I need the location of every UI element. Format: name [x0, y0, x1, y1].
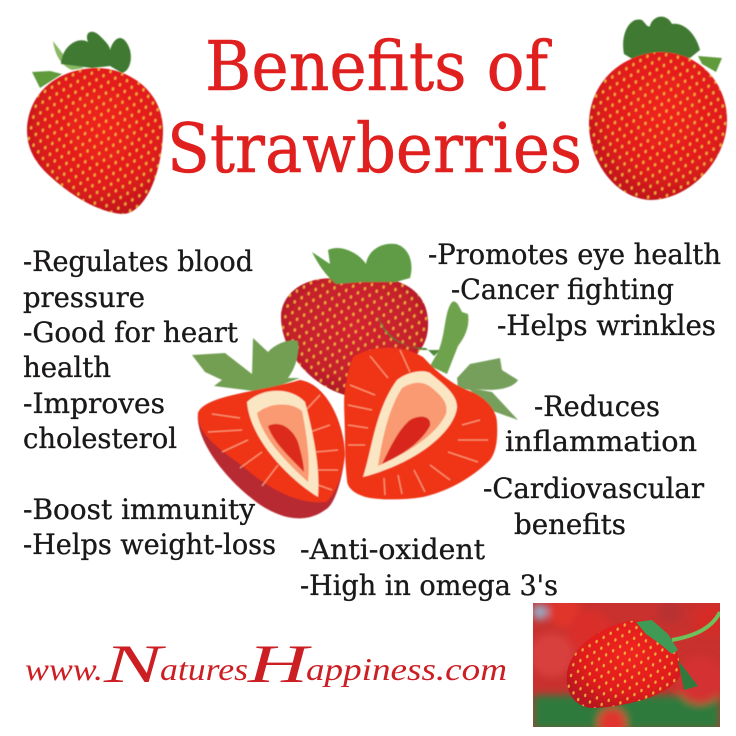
text block: bottom benefits: [300, 533, 558, 602]
text block: left benefits: pressure: [23, 281, 145, 314]
text block: left benefits: -Regulates blood: [23, 245, 253, 278]
text block: right benefits: -Promotes eye health: [428, 238, 721, 271]
icon: top left strawberry: [27, 32, 163, 214]
title: Strawberries: [167, 110, 582, 189]
text block: right benefits: [428, 238, 721, 541]
text block: left benefits: -Helps weight-loss: [23, 528, 276, 561]
website address: N: [102, 634, 167, 694]
text block: left benefits: -Improves: [23, 387, 165, 420]
text block: bottom benefits: -High in omega 3's: [300, 569, 558, 602]
text block: right benefits: benefits: [514, 508, 626, 541]
icon: top right strawberry: [589, 17, 727, 200]
title: Benefits of: [205, 28, 552, 107]
text block: left benefits: [23, 245, 276, 561]
text block: left benefits: -Good for heart: [23, 316, 239, 349]
website address: H: [246, 634, 313, 694]
text block: left benefits: health: [23, 351, 111, 384]
text block: right benefits: -Reduces: [534, 390, 660, 423]
website address: [25, 634, 507, 694]
title: [167, 28, 582, 189]
text block: bottom benefits: -Anti-oxident: [300, 533, 486, 566]
icon: left strawberry half: [192, 338, 345, 518]
website address: atures: [160, 651, 248, 687]
website address: www.: [25, 651, 103, 687]
text block: right benefits: -Helps wrinkles: [497, 309, 716, 342]
website address: appiness.com: [306, 651, 507, 687]
text block: right benefits: -Cancer fighting: [451, 273, 674, 306]
text block: left benefits: -Boost immunity: [23, 493, 255, 526]
text block: right benefits: inflammation: [505, 425, 697, 458]
icon: back whole strawberry: [281, 244, 428, 395]
text block: right benefits: -Cardiovascular: [483, 472, 705, 505]
icon: right strawberry half: [344, 301, 518, 499]
text block: left benefits: cholesterol: [23, 422, 177, 455]
photo: strawberry close-up: [533, 603, 720, 727]
